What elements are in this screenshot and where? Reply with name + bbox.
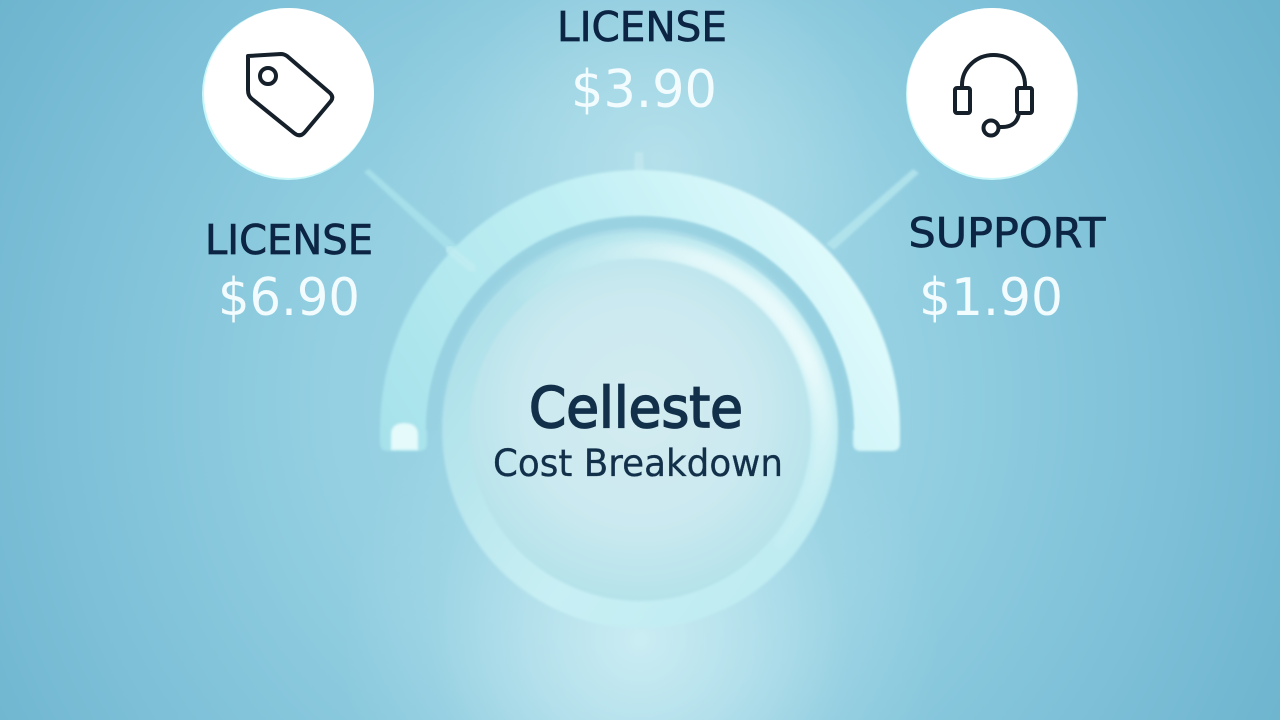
connector: right bbox=[826, 169, 919, 250]
central dial bbox=[442, 232, 838, 628]
gauge arc bbox=[380, 170, 900, 451]
label: license: LICENSE bbox=[557, 3, 727, 51]
dial top highlight bbox=[520, 250, 824, 550]
connector: centre bbox=[633, 152, 645, 196]
item: left license bbox=[202, 8, 374, 328]
connector: left bbox=[364, 169, 476, 272]
gauge end knob bbox=[391, 423, 418, 450]
left connector overlap bbox=[450, 250, 472, 268]
icon: headset bbox=[906, 8, 1078, 180]
label: license: LICENSE bbox=[205, 216, 373, 264]
gauge inner shadow bbox=[432, 222, 848, 430]
item: right support bbox=[906, 8, 1106, 328]
dial title: Celleste bbox=[529, 376, 743, 441]
dial subtitle: Cost Breakdown bbox=[493, 442, 783, 485]
value: $6.90: $6.90 bbox=[218, 268, 360, 328]
dial outer ring bbox=[442, 232, 838, 628]
value: $1.90: $1.90 bbox=[919, 268, 1063, 328]
value: $3.90: $3.90 bbox=[571, 60, 717, 120]
item: centre license bbox=[557, 3, 727, 120]
label: support: SUPPORT bbox=[908, 209, 1106, 257]
icon: price tag bbox=[202, 8, 374, 180]
dial disc bbox=[469, 259, 811, 601]
